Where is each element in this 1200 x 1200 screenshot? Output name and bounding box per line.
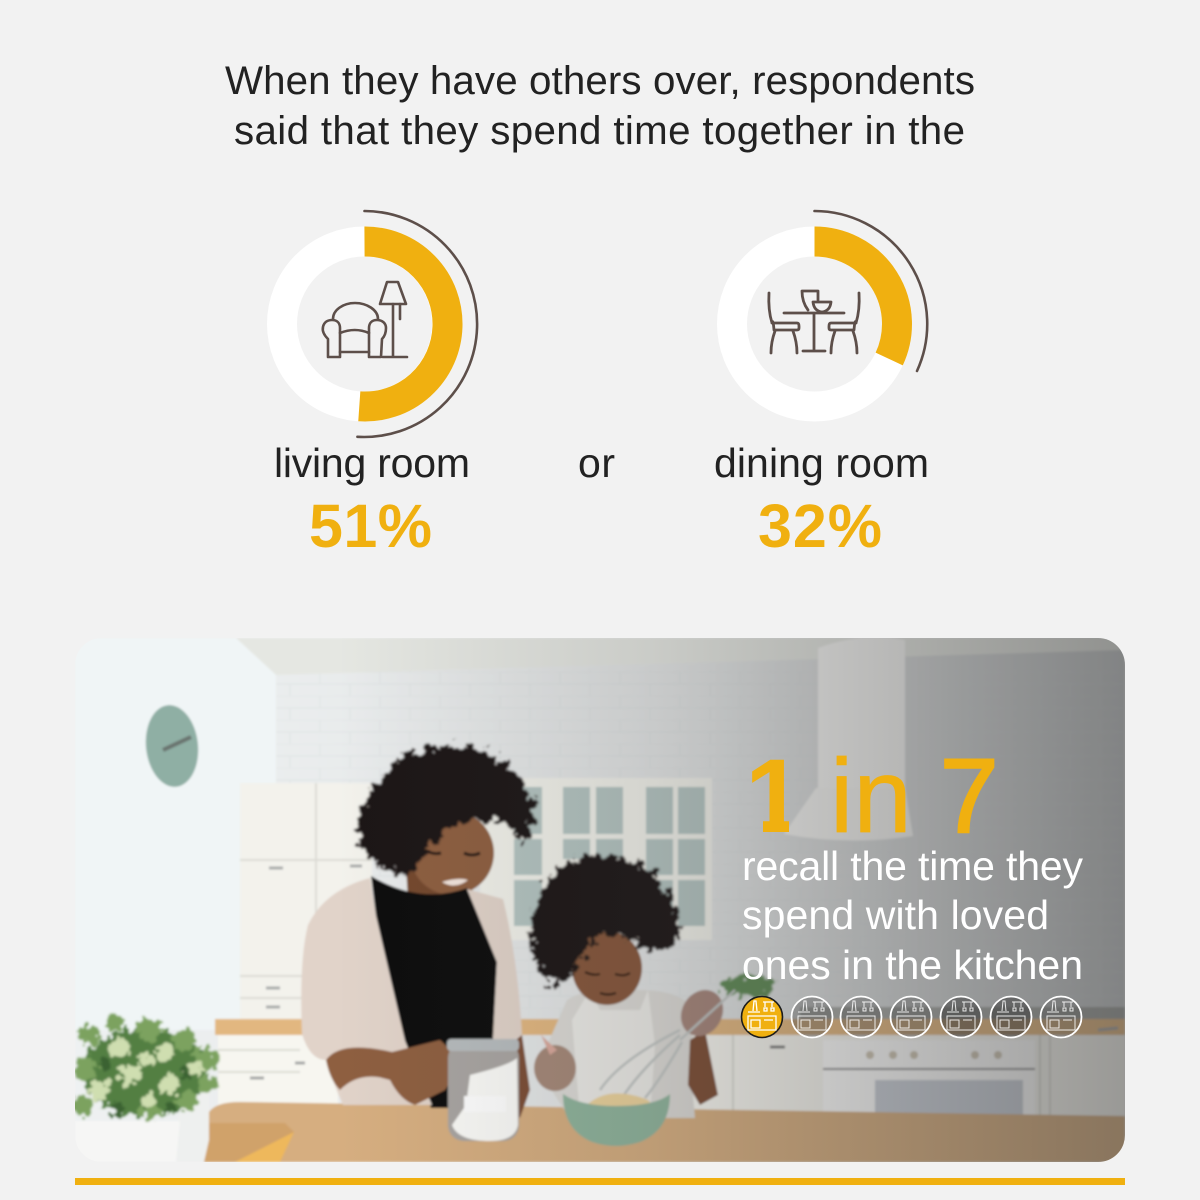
- icon: highlighted kitchen: [742, 996, 782, 1038]
- right arm with whisk hand: [688, 1030, 718, 1105]
- icon: kitchen outline 6: [990, 996, 1032, 1038]
- callout: 1 in 7: [752, 756, 994, 834]
- ceiling: [236, 638, 1125, 675]
- oven: [823, 1040, 1035, 1120]
- plant: [72, 1013, 217, 1121]
- callout: 1 in 7: in: [830, 738, 912, 855]
- panel: dining room statistic: [714, 211, 929, 560]
- icon: kitchen outline 3: [840, 996, 882, 1038]
- eyes: [425, 850, 480, 855]
- value: 32%: 32%: [758, 492, 882, 560]
- backsplash plant: [720, 975, 776, 997]
- back wall: [76, 650, 1125, 1119]
- illustration: kitchen scene: [72, 637, 1126, 1162]
- value: 51%: 51%: [309, 492, 432, 560]
- icon: dining table and chairs: [769, 291, 859, 353]
- heading: [225, 58, 975, 153]
- panel: kitchen photo with 1 in 7 statistic: [72, 637, 1126, 1162]
- donut chart: living room 51%: [282, 211, 477, 437]
- icon: kitchen outline 4: [890, 996, 932, 1038]
- pots: [94, 1113, 211, 1162]
- range hood: [784, 637, 913, 841]
- callout text: spend with loved: [742, 892, 1049, 938]
- dark gradient overlay: [428, 638, 1125, 1162]
- child: [531, 855, 735, 1118]
- label: living room: living room: [274, 440, 470, 486]
- hair: [358, 746, 534, 874]
- icon row: 1 of 7 kitchens highlighted: [742, 996, 1082, 1038]
- connector word: or: or: [578, 440, 615, 486]
- heading: said that they spend time together in the: [234, 108, 965, 153]
- counter: [215, 1019, 1125, 1035]
- table: [199, 1102, 1125, 1162]
- heading: When they have others over, respondents: [225, 58, 975, 103]
- tall cabinets: [240, 783, 372, 1019]
- glass cabinets: [480, 778, 712, 940]
- cardigan: [301, 878, 432, 1105]
- hair: [531, 855, 679, 985]
- whisk: [600, 990, 735, 1098]
- eyes and mouth: [585, 972, 630, 994]
- callout text: ones in the kitchen: [742, 942, 1083, 988]
- wall clock: [144, 704, 200, 788]
- icon: kitchen outline 2: [792, 996, 832, 1038]
- face: [572, 931, 642, 1005]
- kitchen objects on counter: [800, 1007, 1125, 1020]
- shirt: [545, 989, 695, 1118]
- callout text: [742, 843, 1084, 988]
- label: dining room: dining room: [714, 440, 929, 486]
- callout: 1 in 7: 1: [745, 738, 803, 855]
- black top: [371, 876, 497, 1108]
- lower cabinets: [218, 1028, 1125, 1120]
- forearm and hand: [326, 1040, 464, 1105]
- panel: living room statistic: [274, 211, 477, 560]
- mixing bowl: [563, 1093, 670, 1146]
- footer rule: [75, 1178, 1125, 1185]
- tray: [199, 1123, 294, 1162]
- donut chart: dining room 32%: [732, 211, 927, 406]
- left hand: [534, 1045, 576, 1091]
- callout: 1 in 7: 7: [940, 738, 998, 855]
- neck and face: [405, 868, 444, 897]
- icon: kitchen outline 5: [940, 996, 982, 1038]
- callout text: recall the time they: [742, 843, 1084, 889]
- icon: kitchen outline 7: [1040, 996, 1082, 1038]
- left wall: [270, 672, 274, 676]
- smile: [442, 879, 468, 886]
- flour jar: [447, 1039, 519, 1141]
- icon: armchair and floor lamp: [323, 282, 407, 357]
- woman: [301, 746, 534, 1118]
